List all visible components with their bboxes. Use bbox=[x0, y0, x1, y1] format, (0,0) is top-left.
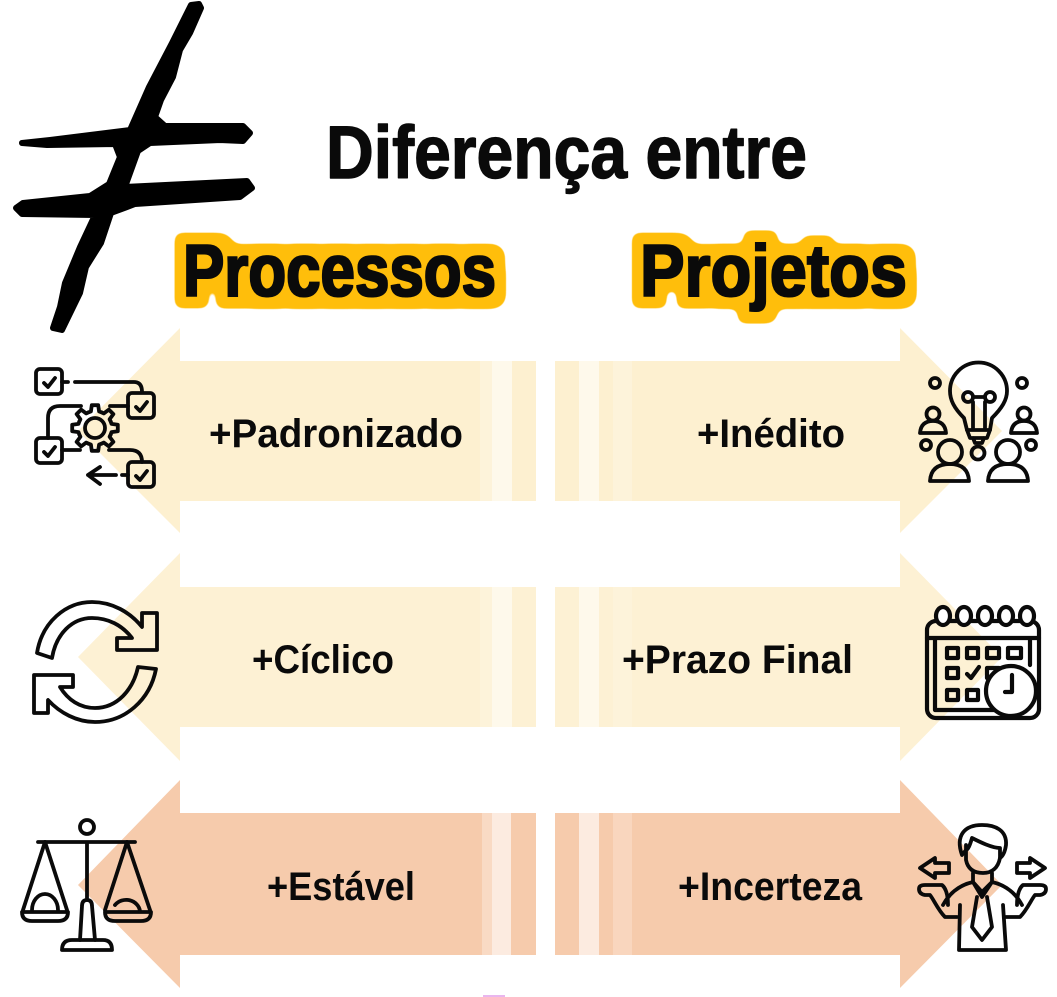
arrow: right Inédito bbox=[555, 328, 1002, 533]
panel: row 3 Estável vs Incerteza bbox=[22, 780, 1046, 988]
icon: calendar with clock bbox=[927, 607, 1039, 718]
heading: Processos: Processos bbox=[183, 231, 496, 312]
label: Cíclico: +Cíclico bbox=[252, 638, 394, 682]
label: Padronizado: +Padronizado bbox=[209, 412, 463, 456]
label: Inédito: +Inédito bbox=[697, 412, 845, 456]
label: Prazo Final: +Prazo Final bbox=[622, 638, 853, 682]
label: Incerteza: +Incerteza bbox=[678, 865, 863, 909]
panel: row 2 Cíclico vs Prazo Final bbox=[34, 553, 1039, 761]
title: Diferença entre bbox=[326, 111, 807, 194]
arrow: left Estável bbox=[78, 780, 536, 988]
arrow: left Padronizado bbox=[78, 328, 536, 533]
icon: not-equal sign bbox=[16, 4, 252, 330]
arrow: right Incerteza bbox=[555, 780, 1002, 988]
icon: light bulb and people bbox=[920, 362, 1037, 481]
arrow: right Prazo Final bbox=[555, 553, 1002, 761]
arrow: left Cíclico bbox=[78, 553, 536, 761]
label: Estável: +Estável bbox=[267, 865, 415, 909]
icon: process with gear and checkboxes bbox=[36, 369, 154, 487]
heading: Projetos: Projetos bbox=[640, 231, 907, 312]
panel: row 1 Padronizado vs Inédito bbox=[36, 328, 1037, 533]
icon: balance scale bbox=[22, 820, 151, 950]
decorative fragment at bottom edge bbox=[483, 995, 505, 997]
icon: cycle arrows bbox=[34, 602, 157, 722]
icon: person shrugging with arrows bbox=[919, 825, 1046, 950]
